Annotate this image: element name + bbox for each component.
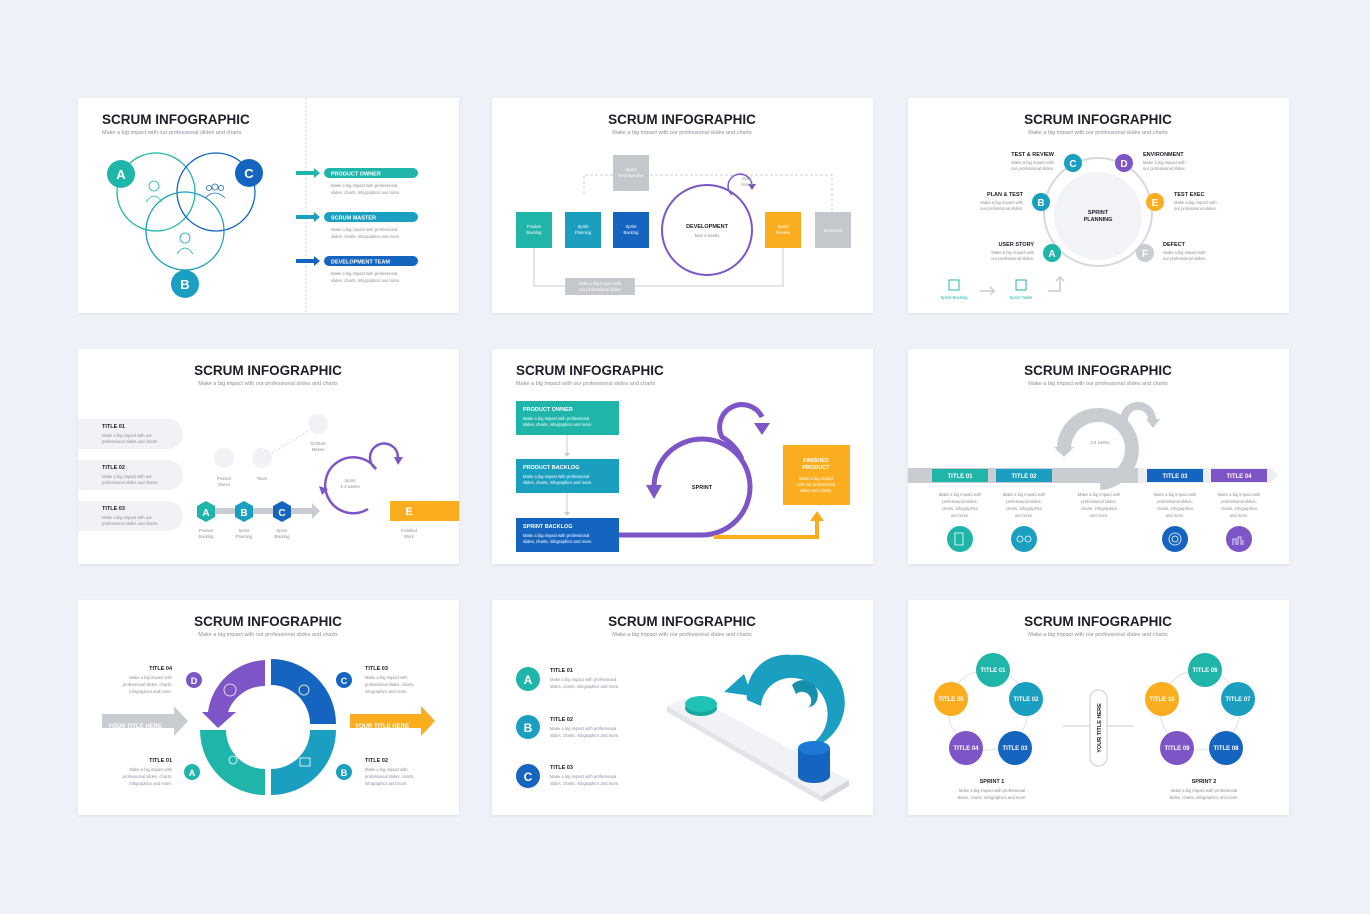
labels: A [189, 768, 196, 778]
flow: Backlog [624, 230, 639, 235]
sprint 1 ring: Make a big impact with professional [959, 788, 1025, 793]
boxes: Make a big impact with professional [523, 474, 589, 479]
title [1024, 363, 1172, 387]
cycle: our professional slides. [1143, 166, 1186, 171]
timeline: and more. [1090, 513, 1108, 518]
labels: professional slides, charts, [123, 682, 172, 687]
flow: Make a big impact with [579, 281, 622, 286]
cycle: Make a big impact with [991, 250, 1035, 255]
labels: TITLE 04 [149, 666, 173, 672]
flow: Scrum [741, 182, 754, 187]
flow: Finished [401, 528, 418, 533]
cycle: our professional slides. [1163, 256, 1206, 261]
cycle: E [1152, 198, 1159, 209]
timeline: professional slides, [1221, 499, 1257, 504]
list: slides, charts, infographics and more. [550, 733, 619, 738]
title: Make a big impact with our professional slides and charts [102, 130, 242, 136]
titles list [78, 419, 183, 531]
sprint 2 ring: SPRINT 2 [1192, 779, 1216, 785]
flow: Sprint [626, 224, 637, 229]
venn diagram [107, 153, 263, 298]
timeline: TITLE 02 [1011, 474, 1037, 480]
timeline: Make a big impact with [1154, 492, 1197, 497]
flow: our professional slides [579, 287, 621, 292]
labels: infographics and more. [129, 781, 172, 786]
title [194, 614, 342, 638]
sprint loop: FINISHED [803, 458, 829, 464]
titles list: professional slides and charts. [102, 521, 158, 526]
labels: D [191, 676, 198, 686]
sprint 1 ring [934, 653, 1043, 800]
flow: Backlog [199, 534, 214, 539]
flow: Master [312, 447, 325, 452]
cycle: C [1069, 159, 1077, 170]
boxes [516, 401, 619, 552]
timeline: professional slides, [942, 499, 978, 504]
timeline: Make a big impact with [1078, 492, 1121, 497]
flow: Review [776, 230, 791, 235]
titles list: Make a big impact with our [102, 433, 152, 438]
cycle: DEFECT [1163, 242, 1186, 248]
titles list: TITLE 01 [102, 424, 125, 430]
list [516, 667, 619, 788]
cycle: USER STORY [999, 242, 1034, 248]
boxes: SPRINT BACKLOG [523, 524, 572, 530]
labels: Make a big impact with [365, 675, 408, 680]
title: Make a big impact with our professional slides and charts [516, 381, 656, 387]
sprint 2 ring: Make a big impact with professional [1171, 788, 1237, 793]
list: TITLE 03 [550, 765, 573, 771]
flow: B [240, 508, 248, 519]
donut [200, 659, 336, 795]
flow: Sprint [626, 167, 637, 172]
flow: A [202, 508, 210, 519]
timeline: and more. [951, 513, 969, 518]
labels: TITLE 01 [149, 758, 172, 764]
sprint 2 ring: TITLE 10 [1149, 697, 1175, 703]
sprint loop: with our professional [797, 482, 835, 487]
labels: professional slides, charts, [365, 774, 414, 779]
sprint 1 ring: TITLE 02 [1013, 697, 1039, 703]
cycle: Sprint Tasks [1010, 295, 1032, 300]
labels: professional slides, charts, [123, 774, 172, 779]
cycle: D [1120, 159, 1128, 170]
labels: Make a big impact with [129, 675, 173, 680]
cycle: B [1037, 198, 1045, 209]
cycle: F [1142, 249, 1148, 260]
slide 1: venn roles [78, 98, 459, 313]
sprint 2 ring: TITLE 07 [1225, 697, 1251, 703]
role list [296, 168, 418, 283]
title [1024, 112, 1172, 136]
timeline: Make a big impact with [1003, 492, 1046, 497]
title: Make a big impact with our professional slides and charts [612, 130, 752, 136]
title: Make a big impact with our professional slides and charts [1028, 632, 1168, 638]
boxes: Make a big impact with professional [523, 533, 589, 538]
timeline: TITLE 04 [1226, 474, 1252, 480]
titles list: Make a big impact with our [102, 474, 152, 479]
flow: Product [217, 476, 232, 481]
cycle: SPRINT [1088, 210, 1109, 216]
role list: slides, charts, infographics and more. [331, 278, 400, 283]
titles list: professional slides and charts. [102, 480, 158, 485]
sprint 2 ring: TITLE 06 [1192, 668, 1218, 674]
flow: Sprint [578, 224, 589, 229]
list: TITLE 02 [550, 717, 573, 723]
list: B [524, 721, 533, 735]
title: SCRUM INFOGRAPHIC [1024, 363, 1172, 378]
labels: TITLE 03 [365, 666, 388, 672]
cycle: PLAN & TEST [987, 192, 1024, 198]
title [194, 363, 342, 387]
sprint 1 ring: slides, charts, infographics and more. [957, 795, 1027, 800]
labels: infographics and more. [129, 689, 172, 694]
timeline: and more. [1166, 513, 1184, 518]
title: SCRUM INFOGRAPHIC [102, 112, 250, 127]
boxes: PRODUCT BACKLOG [523, 465, 580, 471]
cycle: TEST EXEC [1174, 192, 1205, 198]
title: SCRUM INFOGRAPHIC [608, 614, 756, 629]
flow: Sprint [778, 224, 789, 229]
labels [102, 666, 435, 786]
timeline: charts, infographics [1157, 506, 1193, 511]
labels: Make a big impact with [365, 767, 408, 772]
titles list: professional slides and charts. [102, 439, 158, 444]
title [1024, 614, 1172, 638]
timeline: TITLE 03 [1162, 474, 1188, 480]
flow: Sprint [277, 528, 288, 533]
flow: Product [527, 224, 542, 229]
labels: infographics and more. [365, 689, 408, 694]
slide 4: scrum flow [78, 349, 459, 564]
sprint 2 ring [1145, 653, 1255, 800]
boxes: slides, charts, infographics and more. [523, 539, 592, 544]
sprint 1 ring: TITLE 04 [953, 746, 979, 752]
labels: professional slides, charts, [365, 682, 414, 687]
venn diagram: B [180, 277, 190, 292]
labels: Make a big impact with [129, 767, 173, 772]
flow: Backlog [275, 534, 290, 539]
flow: C [278, 508, 286, 519]
slide 3: cycle [908, 98, 1289, 313]
center pill: YOUR TITLE HERE [1097, 703, 1103, 753]
cycle: ENVIRONMENT [1143, 152, 1184, 158]
venn diagram: A [116, 167, 126, 182]
timeline: professional slides, [1081, 499, 1117, 504]
title: Make a big impact with our professional slides and charts [198, 381, 338, 387]
timeline: professional slides, [1157, 499, 1193, 504]
title: Make a big impact with our professional slides and charts [1028, 130, 1168, 136]
flow: E [405, 506, 413, 518]
title [608, 112, 756, 136]
flow: DEVELOPMENT [686, 224, 729, 230]
flow: Max 4 weeks [695, 233, 719, 238]
timeline: TITLE 01 [947, 474, 973, 480]
timeline: and more. [1230, 513, 1248, 518]
flow: 1-4 weeks [340, 484, 360, 489]
timeline: Make a big impact with [1218, 492, 1261, 497]
sprint loop: SPRINT [692, 485, 713, 491]
timeline: and more. [1015, 513, 1033, 518]
labels: infographics and more. [365, 781, 408, 786]
cycle: our professional slides. [980, 206, 1023, 211]
slide 2: process flow [492, 98, 873, 313]
cycle: Make a big impact with [980, 200, 1024, 205]
timeline: 2-4 weeks [1090, 440, 1110, 445]
boxes: slides, charts, infographics and more. [523, 422, 592, 427]
flow: Owner [218, 482, 231, 487]
boxes: slides, charts, infographics and more. [523, 480, 592, 485]
sprint loop: Make a big impact [799, 476, 834, 481]
flow: Sprint [239, 528, 250, 533]
timeline: charts, infographics [942, 506, 978, 511]
sprint 2 ring: slides, charts, infographics and more. [1169, 795, 1239, 800]
sprint 1 ring: SPRINT 1 [980, 779, 1004, 785]
role list: Make a big impact with professional [331, 227, 397, 232]
slide 8: isometric [492, 600, 873, 815]
role list: PRODUCT OWNER [331, 172, 381, 178]
list: slides, charts, infographics and more. [550, 781, 619, 786]
titles list: TITLE 03 [102, 506, 125, 512]
cycle: PLANNING [1084, 217, 1112, 223]
sprint 1 ring: TITLE 03 [1002, 746, 1028, 752]
slide 9: two sprints [908, 600, 1289, 815]
cycle: our professional slides. [1174, 206, 1217, 211]
flow: Retrospective [618, 173, 644, 178]
sprint loop [619, 405, 850, 537]
flow: Increment [824, 228, 843, 233]
cycle: TEST & REVIEW [1011, 152, 1055, 158]
flow: Sprint [345, 478, 356, 483]
title: SCRUM INFOGRAPHIC [194, 363, 342, 378]
title: Make a big impact with our professional slides and charts [612, 632, 752, 638]
role list: slides, charts, infographics and more. [331, 234, 400, 239]
timeline: charts, infographics [1006, 506, 1042, 511]
title [516, 363, 664, 387]
cycle [940, 152, 1217, 300]
list: Make a big impact with professional [550, 774, 616, 779]
title: SCRUM INFOGRAPHIC [608, 112, 756, 127]
sprint loop: PRODUCT [802, 465, 830, 471]
timeline: professional slides, [1006, 499, 1042, 504]
timeline: charts, infographics [1221, 506, 1257, 511]
list: Make a big impact with professional [550, 677, 616, 682]
flow: Work [404, 534, 415, 539]
flow: Planning [575, 230, 592, 235]
title: SCRUM INFOGRAPHIC [1024, 112, 1172, 127]
flow [197, 414, 459, 539]
list: slides, charts, infographics and more. [550, 684, 619, 689]
role list: SCRUM MASTER [331, 216, 376, 222]
sprint 2 ring: TITLE 09 [1164, 746, 1190, 752]
flow: Team [257, 476, 268, 481]
list: A [524, 673, 533, 687]
boxes: PRODUCT OWNER [523, 407, 573, 413]
sprint 1 ring: TITLE 01 [980, 668, 1006, 674]
list: C [524, 770, 533, 784]
title [608, 614, 756, 638]
labels: TITLE 02 [365, 758, 388, 764]
sprint loop: slides and charts. [800, 488, 832, 493]
sprint 2 ring: TITLE 08 [1213, 746, 1239, 752]
timeline [908, 406, 1278, 552]
flow: SCRUM [310, 441, 326, 446]
boxes: Make a big impact with professional [523, 416, 589, 421]
isometric illustration [667, 655, 849, 802]
titles list: Make a big impact with our [102, 515, 152, 520]
title: SCRUM INFOGRAPHIC [1024, 614, 1172, 629]
cycle: A [1048, 249, 1056, 260]
titles list: TITLE 02 [102, 465, 125, 471]
center pill [1063, 690, 1133, 766]
labels: YOUR TITLE HERE [108, 724, 162, 730]
cycle: Make a big impact with [1143, 160, 1186, 165]
timeline: Make a big impact with [939, 492, 982, 497]
role list: Make a big impact with professional [331, 183, 397, 188]
slide 5: sprint loop [492, 349, 873, 564]
title: SCRUM INFOGRAPHIC [516, 363, 664, 378]
flow: Daily [742, 176, 753, 181]
cycle: our professional slides. [1011, 166, 1054, 171]
venn diagram: C [244, 166, 254, 181]
flow: Planning [236, 534, 253, 539]
slide 6: timeline [908, 349, 1289, 564]
cycle: Make a big impact with [1011, 160, 1055, 165]
title: SCRUM INFOGRAPHIC [194, 614, 342, 629]
list: TITLE 01 [550, 668, 573, 674]
title: Make a big impact with our professional slides and charts [1028, 381, 1168, 387]
title: Make a big impact with our professional slides and charts [198, 632, 338, 638]
cycle: our professional slides. [991, 256, 1034, 261]
labels: B [341, 768, 348, 778]
cycle: Make a big impact with [1163, 250, 1206, 255]
flow [516, 155, 851, 295]
timeline: charts, infographics [1081, 506, 1117, 511]
flow: Product [199, 528, 214, 533]
role list: Make a big impact with professional [331, 271, 397, 276]
sprint 1 ring: TITLE 05 [938, 697, 964, 703]
role list: slides, charts, infographics and more. [331, 190, 400, 195]
labels: C [341, 676, 348, 686]
labels: YOUR TITLE HERE [355, 724, 409, 730]
slide 7: donut cycle [78, 600, 459, 815]
flow: Backlog [527, 230, 542, 235]
role list: DEVELOPMENT TEAM [331, 260, 390, 266]
title [102, 112, 250, 136]
cycle: Sprint Backlog [940, 295, 968, 300]
cycle: Make a big impact with [1174, 200, 1217, 205]
list: Make a big impact with professional [550, 726, 616, 731]
